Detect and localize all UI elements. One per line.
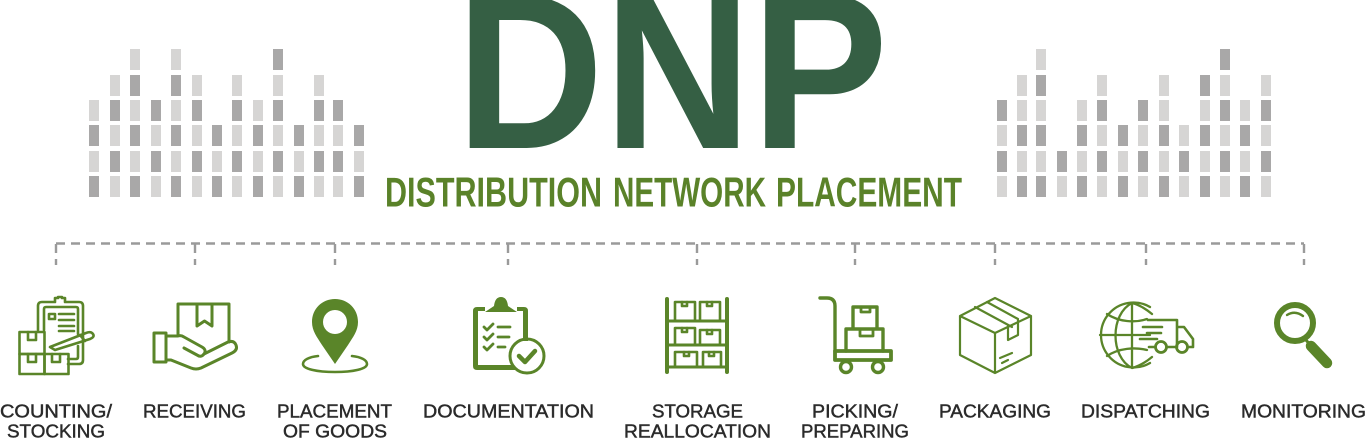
subtitle	[385, 168, 962, 216]
icon: cardboard box	[960, 298, 1031, 373]
label: picking / preparing	[801, 400, 909, 440]
subtitle: DISTRIBUTION	[385, 168, 602, 216]
dashed connector	[56, 244, 1304, 265]
icon: hand holding a box	[154, 304, 236, 369]
label: picking / preparing: PICKING/	[812, 400, 899, 422]
left bar pattern	[89, 49, 364, 197]
label: monitoring: MONITORING	[1241, 400, 1366, 422]
icon: globe with delivery truck	[1100, 302, 1193, 368]
label: placement of goods: PLACEMENT	[277, 400, 392, 422]
icon: magnifying glass	[1277, 305, 1327, 363]
label: storage reallocation	[624, 400, 771, 440]
label: dispatching: DISPATCHING	[1081, 400, 1210, 422]
label: counting / stocking	[0, 400, 113, 440]
label: documentation: DOCUMENTATION	[423, 400, 594, 422]
icon: trolley with boxes	[820, 298, 891, 372]
right bar pattern	[997, 49, 1271, 197]
label: packaging: PACKAGING	[939, 400, 1051, 422]
label: receiving: RECEIVING	[143, 400, 246, 422]
subtitle: PLACEMENT	[776, 168, 962, 216]
icon: storage shelves	[667, 299, 727, 372]
label: storage reallocation: STORAGE	[652, 400, 743, 422]
icon: counting clipboard and boxes	[20, 297, 94, 374]
subtitle: NETWORK	[613, 168, 766, 216]
label: counting / stocking: COUNTING/	[0, 400, 113, 422]
label: placement of goods	[277, 400, 392, 440]
icon: map pin	[303, 299, 367, 372]
icon: documentation clipboard	[473, 297, 544, 373]
